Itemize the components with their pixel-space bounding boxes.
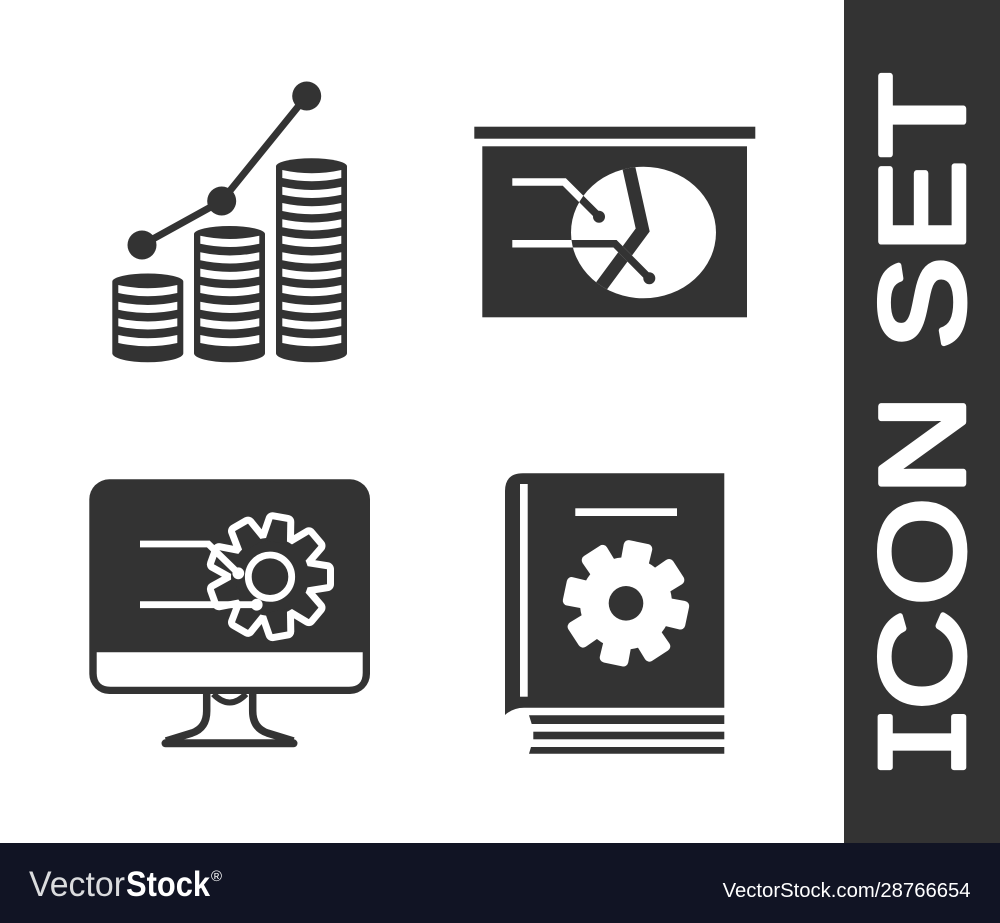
- icon: book with gear on cover: [505, 473, 724, 754]
- icon: presentation board with pie chart: [474, 127, 755, 317]
- pie slice gap: [597, 155, 643, 292]
- icon: computer monitor with gear: [89, 479, 370, 743]
- book cover: [505, 473, 724, 715]
- panel: icon set side bar: [844, 0, 1000, 843]
- heading: ICON SET: S: [856, 257, 989, 349]
- top rail: [474, 127, 755, 139]
- gear callout lines: [140, 544, 259, 607]
- trend line with three dots: [128, 82, 321, 260]
- footer logo: VectorStock: Stock: [126, 865, 210, 904]
- heading: ICON SET: O: [856, 498, 989, 605]
- pie chart: [571, 167, 716, 298]
- monitor chin: [97, 652, 363, 687]
- heading: ICON SET: N: [856, 395, 989, 495]
- book pages: [529, 715, 724, 754]
- heading: ICON SET: C: [856, 610, 989, 710]
- gear outline: [213, 519, 327, 635]
- panel: footer band: [0, 843, 1000, 923]
- footer logo: VectorStock: [29, 865, 222, 904]
- heading: ICON SET: E: [856, 161, 989, 253]
- footer image id: VectorStock.com/28766654: [723, 880, 971, 902]
- heading: ICON SET: T: [856, 73, 989, 157]
- callout lines outside the pie: [512, 182, 649, 278]
- short coin stack: [112, 274, 183, 362]
- footer logo: VectorStock: Vector: [29, 865, 125, 904]
- medium coin stack: [194, 226, 265, 362]
- tall coin stack: [276, 158, 347, 362]
- monitor stand: [166, 692, 294, 743]
- callout lines inside the pie: [572, 196, 656, 284]
- gear: [568, 545, 684, 662]
- monitor body: [89, 479, 370, 694]
- icon: coin stacks with rising line chart: [112, 82, 347, 362]
- heading: ICON SET: I: [858, 704, 1000, 780]
- title bar: [575, 508, 677, 516]
- board: [482, 146, 747, 317]
- heading: ICON SET: [856, 73, 1000, 780]
- spine highlight: [520, 484, 528, 697]
- footer logo: VectorStock: ®: [211, 868, 222, 885]
